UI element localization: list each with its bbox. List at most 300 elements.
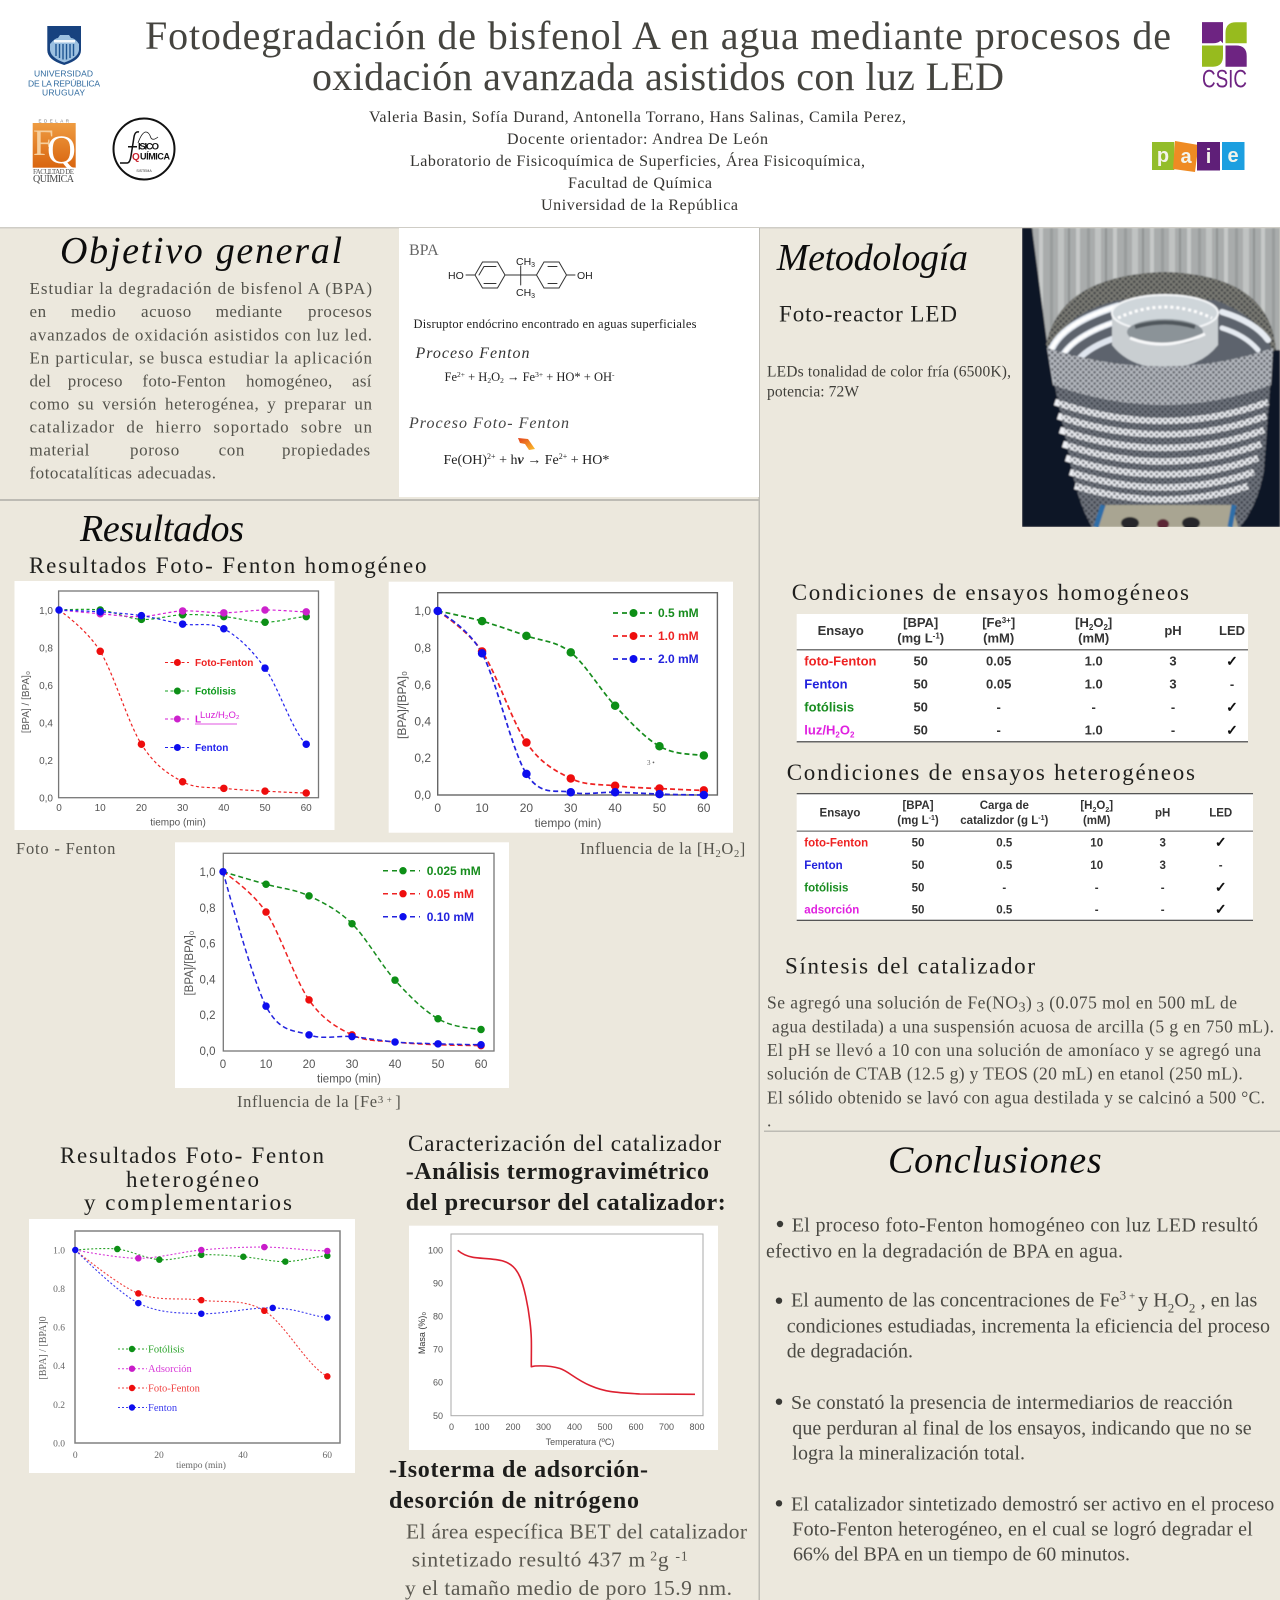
table header: (mg L bbox=[897, 815, 929, 827]
row: foto-Fenton: ✓ bbox=[1215, 835, 1227, 851]
chart: influencia H2O2: 0,0 bbox=[414, 788, 431, 802]
chart: foto-Fenton heterogéneo: 0.8 bbox=[53, 1285, 65, 1295]
chart: TGA: Masa (%)₀ bbox=[417, 1312, 427, 1354]
legend: chart 1: Foto-Fenton bbox=[195, 658, 253, 669]
chart: foto-Fenton heterogéneo: tiempo (min) bbox=[176, 1460, 226, 1471]
row: fotólisis: - bbox=[997, 700, 1001, 715]
row: fotólisis: - bbox=[1002, 882, 1006, 894]
chart: influencia Fe3+: 0,6 bbox=[200, 938, 216, 950]
text block: objetivo: acuoso bbox=[141, 302, 192, 321]
chart: influencia H2O2: 30 bbox=[564, 801, 578, 815]
photo: LED reactor bbox=[1022, 228, 1280, 529]
text block: objetivo: En particular, se busca estudiar la aplicación bbox=[30, 348, 373, 367]
chart: influencia H2O2: tiempo (min) bbox=[535, 816, 601, 830]
caption: influencia H2O2: 2 bbox=[734, 849, 740, 860]
table header: 2 bbox=[1089, 623, 1094, 632]
panel: conclusiones bbox=[766, 1215, 1274, 1566]
legend: chart 1: L bbox=[195, 714, 201, 726]
chart: influencia Fe3+: 1,0 bbox=[200, 867, 216, 879]
logo: Facultad de Química: QUÍMICA bbox=[33, 173, 75, 185]
subheading: análisis termogravimétrico bbox=[406, 1159, 726, 1216]
text block: objetivo: con bbox=[219, 441, 245, 460]
text block: LEDs: potencia: 72W bbox=[767, 384, 859, 401]
chart: TGA: 600 bbox=[628, 1422, 644, 1432]
equation: Foto-Fenton: v → Fe bbox=[517, 453, 559, 468]
authors and affiliation: Docente orientador: Andrea De León bbox=[507, 131, 768, 148]
row: Fenton: 0.05 bbox=[986, 677, 1011, 692]
icon: light flash bbox=[518, 438, 535, 450]
chart: TGA: 100 bbox=[428, 1246, 443, 1256]
conclusion 2: 3 bbox=[1120, 1288, 1126, 1303]
row: adsorción: - bbox=[1161, 905, 1165, 917]
text block: síntesis: . bbox=[767, 1111, 771, 1131]
chart: TGA bbox=[409, 1226, 718, 1450]
caption: foto-Fenton: Foto - Fenton bbox=[16, 839, 116, 858]
table header: (mg L bbox=[897, 631, 933, 646]
subheading: isoterma: desorción de nitrógeno bbox=[389, 1488, 639, 1514]
equation: Fenton: O bbox=[491, 370, 500, 384]
equation: Foto-Fenton: + h bbox=[496, 453, 517, 468]
authors and affiliation: Laboratorio de Fisicoquímica de Superficies, Área Fisicoquímica, bbox=[410, 151, 865, 170]
table header bbox=[818, 615, 1245, 646]
chart: foto-Fenton homogeneo: 40 bbox=[218, 803, 230, 814]
row: Fenton: 3 bbox=[1159, 860, 1166, 872]
row: foto-Fenton bbox=[804, 835, 1227, 851]
table header: -1 bbox=[929, 815, 935, 822]
chart: TGA: 60 bbox=[433, 1378, 443, 1388]
text block: objetivo bbox=[30, 279, 373, 483]
chart: influencia H2O2: 50 bbox=[653, 801, 666, 815]
text block: síntesis: solución de CTAB (12.5 g) y TEOS (20 mL) en etanol (250 mL). bbox=[767, 1064, 1243, 1084]
row: luz/H2O2: O bbox=[840, 723, 850, 738]
chart: foto-Fenton homogeneo: 60 bbox=[301, 803, 312, 814]
text block: objetivo: en bbox=[30, 302, 47, 321]
legend: chart 3: 0.10 mM bbox=[427, 910, 474, 924]
logo: Facultad de Química bbox=[33, 118, 76, 185]
row: fotólisis: ✓ bbox=[1215, 880, 1227, 896]
chart: foto-Fenton heterogéneo: [BPA] / [BPA]0 bbox=[38, 1316, 49, 1380]
legend: chart 1 bbox=[165, 658, 253, 754]
row: foto-Fenton: 3 bbox=[1159, 838, 1166, 850]
table header: pH bbox=[1155, 808, 1170, 820]
text block: objetivo: Estudiar la degradación de bisfenol A (BPA) bbox=[30, 279, 372, 298]
table header: [BPA] bbox=[903, 615, 938, 630]
row: fotólisis: 50 bbox=[912, 882, 924, 894]
legend: chart 1: Luz/H₂O₂ bbox=[200, 710, 240, 721]
subheading: foto-Fenton heterogéneo bbox=[60, 1143, 324, 1215]
heading: conclusiones: Conclusiones bbox=[888, 1140, 1102, 1182]
legend: chart 3 bbox=[383, 864, 481, 924]
panel: BPA and reactions bbox=[399, 228, 759, 497]
row: adsorción: 50 bbox=[912, 905, 924, 917]
text block: objetivo: catalizador de hierro soportado sobre un bbox=[30, 418, 372, 437]
text block: objetivo: mediante bbox=[216, 302, 283, 321]
table header: O bbox=[1093, 615, 1103, 630]
chart: foto-Fenton heterogéneo: 40 bbox=[238, 1451, 248, 1461]
conclusion 3 bbox=[776, 1392, 1252, 1464]
row: foto-Fenton bbox=[804, 654, 1238, 670]
logo: Facultad de Química: F bbox=[33, 123, 54, 164]
text block: LEDs bbox=[767, 364, 1011, 401]
icon: BPA molecule bbox=[448, 256, 593, 300]
row: adsorción: adsorción bbox=[804, 905, 859, 917]
icon: BPA molecule: CH bbox=[516, 256, 531, 268]
text block: síntesis: ) bbox=[1026, 992, 1032, 1012]
chart: TGA: 200 bbox=[505, 1422, 521, 1432]
row: luz/H2O2: 2 bbox=[850, 731, 855, 740]
subheading: ensayos homogéneos: Condiciones de ensayos homogéneos bbox=[792, 580, 1189, 605]
table header: ] bbox=[1109, 800, 1113, 812]
conclusion 2: El aumento de las concentraciones de Fe bbox=[791, 1290, 1120, 1312]
legend: chart 2: 2.0 mM bbox=[658, 652, 699, 666]
chart: TGA: 90 bbox=[433, 1278, 443, 1288]
icon: BPA molecule: OH bbox=[577, 270, 593, 282]
chart: influencia Fe3+: 0 bbox=[220, 1059, 226, 1071]
chart: influencia Fe3+: 40 bbox=[389, 1059, 401, 1071]
row: fotólisis: ✓ bbox=[1226, 700, 1238, 716]
equation: Fenton: + H bbox=[465, 370, 487, 384]
chart: influencia H2O2: 40 bbox=[608, 801, 622, 815]
row: Fenton: 50 bbox=[913, 677, 928, 692]
text block: objetivo: medio bbox=[71, 302, 116, 321]
logo: CSIC: CSIC bbox=[1202, 66, 1247, 94]
conclusion 1: efectivo en la degradación de BPA en agua. bbox=[766, 1241, 1123, 1263]
caption: influencia Fe3+: 3 bbox=[378, 1094, 384, 1106]
table header: 2 bbox=[1105, 807, 1109, 814]
text block: síntesis bbox=[767, 992, 1274, 1131]
text block: BET: g bbox=[658, 1548, 675, 1572]
conclusion 2: 2 bbox=[1189, 1301, 1196, 1316]
logo: Físico Química: Q bbox=[132, 152, 140, 163]
conclusion 2: O bbox=[1174, 1290, 1189, 1312]
logo: Universidad de la República bbox=[28, 26, 100, 98]
row: Fenton: 3 bbox=[1169, 677, 1177, 692]
conclusion 4: 66% del BPA en un tiempo de 60 minutos. bbox=[793, 1544, 1130, 1566]
table header: -1 bbox=[1038, 815, 1045, 822]
chart: foto-Fenton homogeneo: 0,8 bbox=[39, 644, 53, 654]
title: Fotodegradación de bisfenol A en agua mediante procesos de bbox=[145, 13, 1171, 58]
row: foto-Fenton: foto-Fenton bbox=[804, 654, 877, 669]
heading: proceso Fenton: Proceso Fenton bbox=[414, 345, 530, 362]
conclusion 3: logra la mineralización total. bbox=[792, 1442, 1025, 1464]
chart: foto-Fenton homogeneo: 50 bbox=[259, 803, 271, 814]
table header: LED bbox=[1209, 808, 1232, 820]
row: foto-Fenton: 1.0 bbox=[1085, 654, 1103, 669]
text block: síntesis: Se agregó una solución de Fe(NO bbox=[767, 992, 1018, 1012]
row: fotólisis: - bbox=[1095, 882, 1099, 894]
heading: proceso Foto-Fenton: Proceso Foto- Fenton bbox=[408, 415, 569, 432]
row: Fenton bbox=[804, 860, 1223, 872]
heading: metodología: Metodología bbox=[776, 237, 968, 279]
subheading: foto-Fenton heterogéneo: Resultados Foto- Fenton bbox=[60, 1143, 324, 1168]
table header bbox=[820, 800, 1232, 827]
subheading: foto-Fenton heterogéneo: heterogéneo bbox=[126, 1167, 259, 1192]
conclusion 2: 2 bbox=[1168, 1301, 1174, 1316]
chart: foto-Fenton heterogéneo: 1.0 bbox=[53, 1246, 65, 1256]
chart: influencia Fe3+: 0,0 bbox=[200, 1046, 216, 1058]
text block: objetivo: foto-Fenton bbox=[142, 371, 226, 390]
chart: influencia H2O2: 60 bbox=[697, 801, 711, 815]
row: Fenton: 50 bbox=[912, 860, 924, 872]
table header: ) bbox=[940, 631, 944, 646]
table header: Ensayo bbox=[818, 623, 864, 638]
table header: 2 bbox=[1092, 807, 1096, 814]
text block: objetivo: homogéneo, bbox=[246, 371, 333, 390]
text block: LEDs: LEDs tonalidad de color fría (6500K), bbox=[767, 364, 1011, 381]
row: foto-Fenton: foto-Fenton bbox=[804, 838, 868, 850]
chart: influencia Fe3+: 0,4 bbox=[200, 974, 216, 986]
text block: objetivo: así bbox=[352, 371, 372, 390]
legend: chart 4 bbox=[118, 1344, 201, 1414]
row: foto-Fenton: 0.5 bbox=[996, 838, 1013, 850]
table header: O bbox=[1096, 800, 1105, 812]
row: luz/H2O2: - bbox=[997, 723, 1001, 738]
row: luz/H2O2 bbox=[804, 723, 1238, 740]
logo: Universidad de la República: UNIVERSIDAD bbox=[34, 69, 93, 79]
row: adsorción: - bbox=[1095, 905, 1099, 917]
subheading: análisis termogravimétrico: -Análisis termogravimétrico bbox=[406, 1159, 709, 1185]
subheading: foto-Fenton heterogéneo: y complementarios bbox=[84, 1190, 292, 1215]
chart: influencia H2O2: 10 bbox=[475, 801, 489, 815]
conclusion 3: Se constató la presencia de intermediarios de reacción bbox=[791, 1392, 1233, 1414]
label: BPA: BPA bbox=[409, 242, 439, 259]
chart: foto-Fenton homogeneo: 10 bbox=[95, 803, 106, 814]
text block: objetivo: procesos bbox=[308, 302, 372, 321]
chart: foto-Fenton homogeneo: 0,2 bbox=[39, 756, 53, 767]
conclusion 1 bbox=[766, 1215, 1258, 1263]
table header: ] bbox=[1011, 615, 1015, 630]
text block: objetivo: propiedades bbox=[282, 441, 371, 460]
table: ensayos heterogéneos bbox=[797, 793, 1253, 921]
chart: foto-Fenton homogeneo: 0,4 bbox=[39, 719, 53, 730]
title: oxidación avanzada asistidos con luz LED bbox=[312, 54, 1004, 99]
text: disruptor: Disruptor endócrino encontrado en aguas superficiales bbox=[414, 317, 697, 331]
table header: 2 bbox=[1103, 623, 1108, 632]
logo: PAIE bbox=[1152, 141, 1244, 172]
row: luz/H2O2: 2 bbox=[835, 731, 840, 740]
row: fotólisis: - bbox=[1092, 700, 1096, 715]
chart: influencia Fe3+: 50 bbox=[432, 1059, 444, 1071]
chart: influencia H2O2: 20 bbox=[520, 801, 533, 815]
logo: Físico Química: ISICO bbox=[138, 142, 159, 152]
legend: chart 2: 1.0 mM bbox=[658, 629, 699, 643]
row: Fenton: - bbox=[1219, 860, 1223, 872]
logo: PAIE: p bbox=[1157, 145, 1169, 167]
equation: Foto-Fenton: 2+ bbox=[559, 452, 568, 461]
conclusion 1: El proceso foto-Fenton homogéneo con luz LED resultó bbox=[792, 1215, 1258, 1237]
caption: influencia H2O2: ] bbox=[740, 839, 746, 858]
table header: (mM) bbox=[1078, 631, 1109, 646]
row: Fenton: 10 bbox=[1090, 860, 1103, 872]
row: fotólisis: - bbox=[1161, 882, 1165, 894]
text block: BET: 2 bbox=[646, 1550, 658, 1565]
legend: chart 4: Fotólisis bbox=[148, 1344, 184, 1356]
text block: objetivo: fotocatalíticas adecuadas. bbox=[30, 464, 216, 483]
chart: influencia H2O2: [BPA]/[BPA]₀ bbox=[395, 671, 409, 739]
logo: Físico Química: UÍMICA bbox=[140, 152, 170, 162]
logo: Facultad de Química: Q bbox=[47, 127, 76, 172]
row: foto-Fenton: 50 bbox=[913, 654, 928, 669]
table header: [H bbox=[1075, 615, 1089, 630]
equation: Foto-Fenton: 2+ bbox=[487, 452, 496, 461]
row: Fenton bbox=[804, 677, 1234, 692]
legend: chart 1: Fenton bbox=[195, 743, 228, 754]
subheading: isoterma bbox=[389, 1457, 648, 1514]
table header: [H bbox=[1080, 800, 1092, 812]
table header: -1 bbox=[933, 632, 940, 641]
logo: Facultad de Química: FACULTAD DE bbox=[33, 168, 74, 176]
chart: foto-Fenton heterogéneo: 60 bbox=[323, 1451, 332, 1461]
text block: síntesis: 3 bbox=[1018, 1000, 1025, 1015]
legend: chart 2: 0.5 mM bbox=[658, 606, 699, 620]
caption: influencia H2O2: 2 bbox=[716, 849, 721, 860]
chart: foto-Fenton homogeneo: 1,0 bbox=[39, 606, 53, 617]
equation: Fenton: 3+ bbox=[535, 370, 543, 379]
chart: influencia Fe3+: tiempo (min) bbox=[317, 1074, 381, 1086]
table header: [Fe bbox=[982, 615, 1002, 630]
equation: Fenton: + HO* + OH bbox=[543, 370, 612, 384]
row: foto-Fenton: ✓ bbox=[1226, 654, 1238, 670]
chart: TGA: 70 bbox=[433, 1344, 443, 1354]
text block: síntesis: 3 bbox=[1032, 999, 1044, 1015]
table header: ) bbox=[1044, 815, 1048, 827]
table header: ) bbox=[935, 815, 939, 827]
table header: 3+ bbox=[1002, 616, 1011, 625]
table header: pH bbox=[1164, 623, 1182, 638]
text block: síntesis: El pH se llevó a 10 con una solución de amoníaco y se agregó una bbox=[767, 1040, 1261, 1060]
conclusion 2: condiciones estudiadas, incrementa la eficiencia del proceso bbox=[787, 1315, 1270, 1337]
row: fotólisis: fotólisis bbox=[804, 882, 848, 894]
row: foto-Fenton: 50 bbox=[912, 838, 924, 850]
equation: Fenton: → Fe bbox=[504, 370, 536, 384]
row: luz/H2O2: ✓ bbox=[1226, 723, 1238, 739]
icon: BPA molecule: HO bbox=[448, 270, 464, 282]
logo: Físico Química bbox=[114, 118, 174, 180]
chart: influencia H2O2: 0,2 bbox=[414, 751, 431, 765]
subheading: resultados homogéneo: Resultados Foto- Fenton homogéneo bbox=[29, 553, 426, 578]
chart: foto-Fenton heterogéneo: 0.6 bbox=[53, 1324, 65, 1334]
chart: influencia H2O2: 0,8 bbox=[414, 641, 431, 655]
conclusion 2 bbox=[776, 1288, 1270, 1362]
conclusion 3: que perduran al final de los ensayos, indicando que no se bbox=[792, 1417, 1252, 1439]
row: Fenton: 0.5 bbox=[996, 860, 1013, 872]
subheading: síntesis: Síntesis del catalizador bbox=[785, 953, 1035, 978]
chart: foto-Fenton homogeneo: 30 bbox=[177, 803, 189, 814]
icon: BPA molecule: CH bbox=[516, 287, 531, 299]
equation: Fenton: 2+ bbox=[457, 370, 465, 379]
conclusion 2: , en las bbox=[1196, 1290, 1257, 1312]
conclusion 4: El catalizador sintetizado demostró ser activo en el proceso bbox=[791, 1494, 1274, 1516]
authors and affiliation: Facultad de Química bbox=[568, 175, 712, 192]
chart: influencia Fe3+: 30 bbox=[346, 1059, 358, 1071]
logo: PAIE: a bbox=[1180, 146, 1192, 168]
title bbox=[145, 13, 1171, 99]
subheading: foto-reactor: Foto-reactor LED bbox=[779, 302, 957, 327]
text block: objetivo: del bbox=[30, 371, 51, 390]
table header: LED bbox=[1219, 623, 1245, 638]
table header: [BPA] bbox=[902, 800, 934, 812]
row: Fenton: Fenton bbox=[804, 860, 843, 872]
row: Fenton: - bbox=[1230, 677, 1234, 692]
chart: TGA: 800 bbox=[689, 1422, 705, 1432]
caption: influencia H2O2: Influencia de la [H bbox=[580, 839, 716, 858]
legend: chart 2 bbox=[613, 606, 699, 666]
chart: influencia H2O2: 0 bbox=[434, 801, 441, 815]
chart: TGA: 50 bbox=[433, 1411, 443, 1421]
icon: BPA molecule: 3 bbox=[531, 262, 535, 269]
logo: CSIC bbox=[1202, 22, 1247, 94]
row: fotólisis: 50 bbox=[913, 700, 928, 715]
chart: foto-Fenton heterogéneo: 0.2 bbox=[53, 1401, 65, 1411]
logo: PAIE: i bbox=[1206, 146, 1211, 168]
chart: TGA: 700 bbox=[659, 1422, 674, 1432]
chart: influencia Fe3+: 0,8 bbox=[200, 903, 216, 915]
chart: TGA: 0 bbox=[449, 1422, 454, 1432]
row: adsorción: ✓ bbox=[1215, 902, 1227, 918]
row: foto-Fenton: 0.05 bbox=[986, 654, 1011, 669]
text block: objetivo: material bbox=[30, 441, 90, 460]
chart: foto-Fenton homogeneo: tiempo (min) bbox=[150, 818, 206, 829]
chart: foto-Fenton homogeneo: 0 bbox=[56, 803, 62, 814]
table header: ] bbox=[1108, 615, 1112, 630]
text block: objetivo: poroso bbox=[130, 441, 180, 460]
row: luz/H2O2: - bbox=[1171, 723, 1175, 738]
chart: TGA: 100 bbox=[474, 1422, 490, 1432]
equation: Fenton: 2 bbox=[500, 376, 504, 385]
row: fotólisis bbox=[804, 880, 1227, 896]
chart: influencia Fe3+: [BPA]/[BPA]₀ bbox=[184, 930, 196, 996]
caption: influencia Fe3+: ] bbox=[395, 1092, 401, 1111]
table header: Carga de bbox=[980, 800, 1029, 812]
text block: BET: sintetizado resultó 437 m bbox=[412, 1548, 646, 1572]
row: luz/H2O2: luz/H bbox=[804, 723, 835, 738]
table header: Ensayo bbox=[820, 808, 860, 820]
chart: influencia Fe3+: 20 bbox=[303, 1059, 315, 1071]
conclusion 2: y H bbox=[1138, 1290, 1168, 1312]
chart: influencia H2O2: 0,4 bbox=[414, 714, 431, 728]
caption: influencia Fe3+: Influencia de la [Fe bbox=[237, 1092, 378, 1111]
table header: catalizdor (g L bbox=[960, 815, 1038, 827]
text block: BET: -1 bbox=[675, 1550, 688, 1565]
subheading: isoterma: -Isoterma de adsorción- bbox=[389, 1457, 648, 1483]
chart: influencia H2O2: 0,6 bbox=[414, 678, 431, 692]
chart: TGA: 500 bbox=[597, 1422, 613, 1432]
icon: BPA molecule: 3 bbox=[531, 293, 535, 300]
equation: Foto-Fenton: + HO* bbox=[567, 453, 609, 468]
legend: chart 4: Adsorción bbox=[148, 1364, 192, 1375]
logo: Físico Química: SISTEMA bbox=[136, 169, 152, 173]
chart: influencia Fe3+: 60 bbox=[475, 1059, 487, 1071]
chart: influencia Fe3+: 10 bbox=[260, 1059, 272, 1071]
authors and affiliation: Valeria Basin, Sofía Durand, Antonella Torrano, Hans Salinas, Camila Perez, bbox=[369, 109, 906, 126]
chart: influencia H2O2 bbox=[389, 582, 733, 833]
row: adsorción bbox=[804, 902, 1227, 918]
text block: síntesis: El sólido obtenido se lavó con agua destilada y se calcinó a 500 °C. bbox=[767, 1087, 1265, 1107]
equation: Foto-Fenton: Fe(OH) bbox=[444, 453, 487, 468]
panel: objetivo general bbox=[30, 230, 373, 483]
row: luz/H2O2: 1.0 bbox=[1085, 723, 1103, 738]
row: foto-Fenton: 10 bbox=[1090, 838, 1103, 850]
conclusion 4 bbox=[776, 1494, 1274, 1566]
logo: Universidad de la República: URUGUAY bbox=[42, 88, 85, 98]
subheading: análisis termogravimétrico: del precursor del catalizador: bbox=[406, 1190, 726, 1216]
text block: BET: El área específica BET del catalizador bbox=[406, 1519, 747, 1543]
text block: objetivo: proceso bbox=[68, 371, 123, 390]
caption: influencia H2O2: O bbox=[721, 839, 734, 858]
chart: foto-Fenton homogeneo bbox=[14, 581, 334, 830]
chart: TGA: Temperatura (ºC) bbox=[546, 1437, 614, 1447]
chart: foto-Fenton heterogéneo bbox=[29, 1219, 355, 1473]
